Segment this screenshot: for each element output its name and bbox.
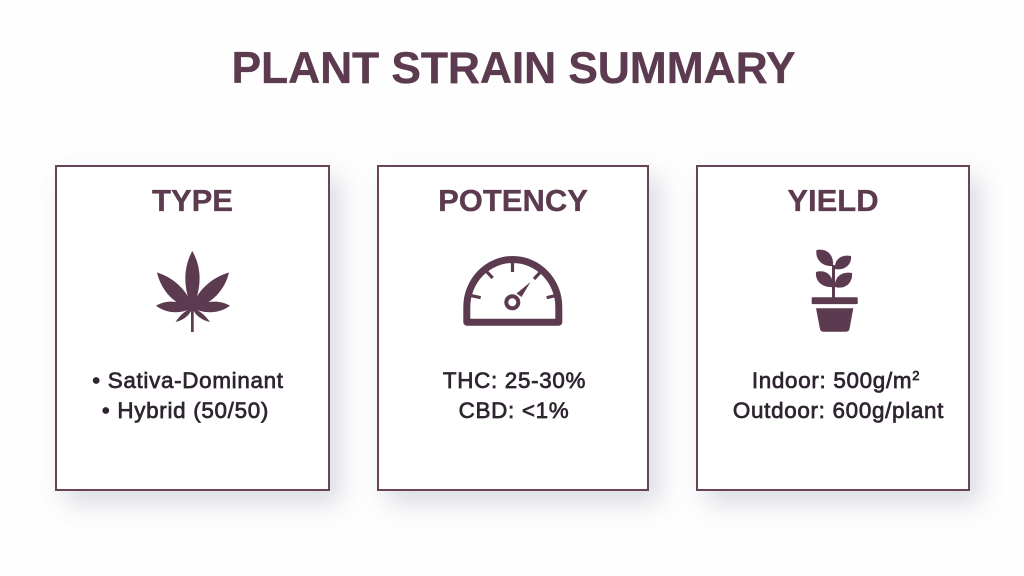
text: potency values: THC: 25-30% (443, 368, 586, 393)
panel: yield (696, 165, 970, 491)
text: yield values: Outdoor: 600g/plant (733, 398, 944, 423)
heading: potency: POTENCY (438, 183, 588, 218)
title: PLANT STRAIN SUMMARY (232, 44, 795, 93)
text: yield values: Indoor: 500g/m2 (752, 368, 920, 393)
icon: gauge (463, 256, 562, 326)
gauge needle (516, 282, 530, 297)
text: yield values (733, 368, 944, 423)
text: type list (92, 368, 284, 423)
text: type list: • Hybrid (50/50) (102, 398, 269, 423)
text: potency values (443, 368, 586, 423)
heading: type: TYPE (152, 183, 233, 218)
panel: type (55, 165, 330, 491)
heading: yield: YIELD (787, 183, 879, 218)
icon: potted plant (812, 250, 858, 332)
text: type list: • Sativa-Dominant (92, 368, 284, 393)
text: potency values: CBD: <1% (459, 398, 569, 423)
icon: cannabis leaf (156, 251, 230, 332)
panel: potency (377, 165, 649, 491)
